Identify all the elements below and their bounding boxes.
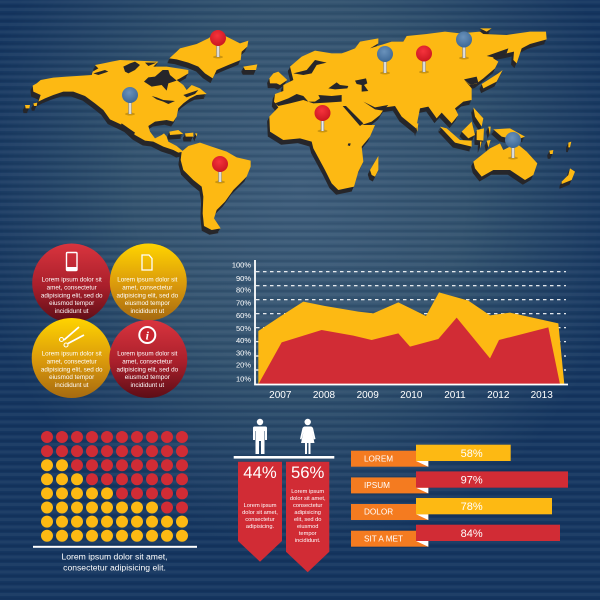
x axis labels: 2011	[444, 390, 466, 401]
text: info circle: incididunt ut	[130, 382, 164, 389]
panel: sim circle	[110, 244, 187, 320]
row: ipsum 97%: IPSUM	[364, 481, 390, 490]
map pins	[122, 30, 521, 184]
y axis labels: 80%	[236, 286, 251, 294]
text: sim circle: incididunt ut	[130, 308, 164, 315]
y axis labels: 60%	[236, 311, 251, 320]
text: phone circle: Lorem ipsum dolor sit	[42, 276, 102, 284]
y axis labels: 70%	[236, 298, 251, 308]
y axis labels: 10%	[236, 374, 251, 384]
x axis labels	[269, 390, 553, 401]
icon: info: i	[146, 328, 150, 342]
y axis labels: 50%	[236, 324, 251, 333]
pin: Russia	[416, 46, 432, 74]
pin: South America	[212, 156, 228, 184]
text: left banner: consectetur	[245, 517, 275, 523]
caption: Lorem ipsum dolor sit amet,	[61, 552, 168, 562]
panel: info circle	[109, 320, 187, 398]
icon: man	[253, 419, 267, 454]
text: scissors circle: Lorem ipsum dolor sit	[42, 350, 102, 358]
icon: sim card	[142, 255, 152, 270]
text: info circle: adipisicing elit, sed do	[116, 366, 179, 373]
pin: Africa	[314, 105, 330, 132]
text: left banner: Lorem ipsum	[244, 503, 276, 509]
text: info circle: eiusmod tempor	[125, 374, 170, 381]
yellow area	[258, 292, 564, 384]
banner: 56%	[286, 462, 329, 572]
row: lorem 58%: LOREM	[364, 454, 393, 463]
x axis labels: 2007	[269, 390, 292, 401]
text: scissors circle: adipisicing elit, sed do	[41, 366, 103, 373]
text: right banner: adipisicing	[294, 510, 321, 516]
text: scissors circle: incididunt ut	[55, 382, 89, 389]
circle panels	[32, 244, 187, 398]
pin: North America	[122, 87, 138, 116]
text: phone circle: incididunt ut	[55, 308, 89, 315]
text: sim circle: amet, consectetur	[122, 284, 172, 291]
row: ipsum 97%: 97%	[461, 474, 483, 486]
text: info circle: Lorem ipsum dolor sit	[117, 350, 177, 358]
dot matrix	[33, 431, 197, 572]
icon: scissors	[60, 327, 84, 347]
y axis labels: 90%	[236, 274, 251, 283]
row: dolor 78%: DOLOR	[364, 508, 393, 517]
row: sit a met 84%: SIT A MET	[364, 534, 403, 543]
text: left banner: dolor sit amet,	[242, 510, 278, 516]
panel: phone circle	[32, 244, 111, 322]
text: scissors circle: eiusmod tempor	[49, 374, 94, 381]
x axis labels: 2008	[313, 390, 336, 401]
x axis labels: 2009	[357, 390, 379, 401]
text: scissors circle: amet, consectetur	[47, 358, 97, 365]
row: dolor 78%: 78%	[461, 501, 483, 513]
axes	[255, 260, 568, 384]
y axis labels: 20%	[236, 360, 251, 370]
x axis labels: 2010	[400, 390, 423, 401]
text: right banner: Lorem ipsum	[291, 489, 324, 495]
divider bar	[234, 456, 334, 459]
banner: 44%	[238, 462, 282, 562]
row: sit a met 84%	[351, 525, 560, 547]
row: lorem 58%: 58%	[461, 448, 483, 460]
red area	[258, 318, 560, 384]
caption: consectetur adipisicing elit.	[63, 562, 166, 572]
text: phone circle: adipisicing elit, sed do	[41, 292, 103, 299]
icon: phone	[66, 252, 77, 270]
pin: East Asia	[456, 32, 472, 60]
icon: woman	[300, 419, 316, 454]
ribbon bars	[351, 445, 568, 547]
value: 44%: 44%	[243, 463, 277, 482]
row: ipsum 97%	[351, 471, 568, 493]
y axis labels: 100%	[232, 260, 251, 270]
text: info circle: amet, consectetur	[122, 358, 172, 365]
pin: Australia	[505, 132, 521, 160]
text: right banner: consectetur	[293, 503, 323, 509]
y axis labels	[232, 260, 251, 384]
map water details	[93, 48, 508, 146]
row: lorem 58%	[351, 445, 511, 467]
text: right banner: dolor sit amet,	[290, 496, 326, 502]
pin: Europe	[377, 46, 393, 74]
text: phone circle: eiusmod tempor	[49, 300, 94, 307]
text: phone circle: amet, consectetur	[47, 284, 97, 291]
world map	[23, 28, 575, 235]
baseline	[33, 546, 197, 548]
x axis labels: 2012	[487, 390, 510, 401]
y axis labels: 40%	[236, 336, 251, 345]
gender panel	[234, 419, 334, 572]
y axis labels: 30%	[236, 348, 251, 358]
row: sit a met 84%: 84%	[461, 528, 483, 540]
text: right banner: tempor	[299, 531, 317, 537]
text: sim circle: eiusmod tempor	[125, 300, 170, 307]
text: left banner: adipisicing.	[246, 524, 274, 530]
text: right banner: elit, sed do	[294, 517, 321, 523]
text: right banner: eiusmod	[297, 524, 318, 530]
row: dolor 78%	[351, 498, 552, 520]
dots	[41, 431, 188, 542]
value: 56%: 56%	[291, 463, 325, 482]
x axis labels: 2013	[531, 390, 553, 401]
panel: scissors circle	[32, 318, 112, 398]
text: right banner: incididunt.	[295, 538, 321, 544]
area chart	[232, 260, 568, 401]
text: sim circle: adipisicing elit, sed do	[116, 292, 179, 299]
pin: Greenland	[210, 30, 226, 58]
text: sim circle: Lorem ipsum dolor sit	[117, 276, 177, 284]
